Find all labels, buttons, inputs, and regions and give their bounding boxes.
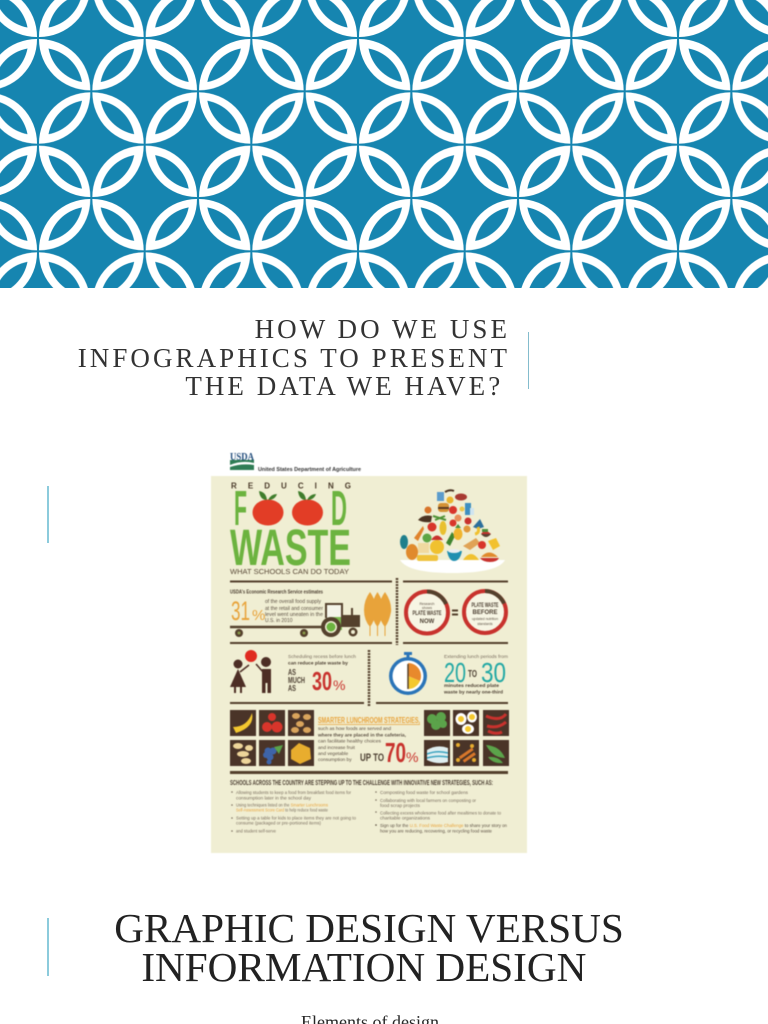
bullet list: left: Using techniques listed on the Smarter Lunchrooms <box>236 802 328 808</box>
chart: plate waste before: BEFORE <box>472 610 498 616</box>
bullet list: right: Composting food waste for school gardens <box>380 790 468 795</box>
text: 31 percent: % <box>252 607 265 624</box>
text: smarter lunchroom strategies <box>317 716 420 768</box>
icon: tractor and trailer <box>230 604 360 637</box>
poster title <box>230 482 351 576</box>
bullet list: left: and student self-serve <box>236 828 277 834</box>
bullet list: left: consume (packaged or pre-portioned items) <box>236 820 322 826</box>
chart: plate waste now: NOW <box>420 619 435 625</box>
text: 30 percent: 30 <box>312 666 332 696</box>
text: 20 to 30 minutes: minutes reduced plate <box>444 683 499 689</box>
title: THE DATA WE HAVE? <box>185 371 503 401</box>
text: 20 to 30 minutes: Extending lunch periods from <box>444 654 508 660</box>
icon: apples <box>252 491 323 526</box>
icon: food pyramid <box>400 490 505 573</box>
text: 31 percent: 31 <box>231 596 250 626</box>
poster title: WHAT SCHOOLS CAN DO TODAY <box>230 567 349 576</box>
poster title: WASTE <box>230 519 351 576</box>
bullet list: right: food scrap projects <box>380 803 420 808</box>
chart: plate waste before <box>464 591 506 633</box>
bullet list: right: how you are reducing, recovering, or recycling food waste <box>380 828 493 834</box>
chart: plate waste now: shows <box>422 606 432 610</box>
bullet list: right: Collecting excess wholesome food after mealtimes to donate to <box>380 810 502 816</box>
poster background <box>211 476 527 853</box>
text: 20 to 30 minutes: waste by nearly one-third <box>443 690 503 696</box>
text: 30 percent: AS <box>288 684 296 693</box>
chart: plate waste now: PLATE WASTE <box>412 611 442 617</box>
accent line: infographic <box>47 486 49 543</box>
accent line: title <box>528 332 529 389</box>
USDA logo: USDA <box>230 452 255 463</box>
text: smarter lunchroom strategies: such as how foods are served and <box>318 726 391 732</box>
text: 31 percent: at the retail and consumer <box>265 606 323 612</box>
heading: schools across the country: SCHOOLS ACROSS THE COUNTRY ARE STEPPING UP TO THE CHALLENGE WITH INNOVATIVE NEW STRATEGIES, SUCH AS: <box>230 780 493 787</box>
icon: stopwatch <box>389 652 427 695</box>
bullet list: left <box>231 790 357 834</box>
title <box>78 314 510 401</box>
text: 30 percent <box>288 654 356 696</box>
text: 30 percent: Scheduling recess before lunch <box>288 654 356 660</box>
text: smarter lunchroom strategies: consumption by <box>318 757 352 763</box>
USDA logo: United States Department of Agriculture <box>258 467 361 473</box>
equals sign <box>452 610 458 614</box>
chart: plate waste before: PLATE WASTE <box>472 603 498 609</box>
chart: plate waste before: standards <box>477 622 493 626</box>
poster title: F <box>234 482 247 536</box>
accent line: second heading <box>47 918 49 976</box>
bullet list: left: Allowing students to keep a food from breakfast food items for <box>236 790 352 795</box>
bullet list: right <box>375 790 508 834</box>
divider: lower <box>230 771 508 774</box>
text: smarter lunchroom strategies: can facilitate healthy choices <box>318 738 382 744</box>
heading: graphic design versus information design: GRAPHIC DESIGN VERSUS <box>114 905 624 951</box>
text: smarter lunchroom strategies: where they are placed in the cafeteria, <box>317 732 407 738</box>
icon: wheat <box>364 592 391 636</box>
text: 30 percent: % <box>333 677 345 693</box>
text: 31 percent: of the overall food supply <box>265 599 322 605</box>
text: 30 percent: can reduce plate waste by <box>288 660 348 666</box>
heading: graphic design versus information design: INFORMATION DESIGN <box>141 944 586 990</box>
text: smarter lunchroom strategies: and vegetable <box>318 751 348 757</box>
text: 20 to 30 minutes: 30 <box>481 657 506 688</box>
text: smarter lunchroom strategies: SMARTER LUNCHROOM STRATEGIES, <box>318 716 420 725</box>
bullet list: left: consumption later in the school day <box>236 796 312 800</box>
USDA infographic poster <box>210 452 528 854</box>
dividers: upper <box>230 582 508 703</box>
icon: children with ball <box>230 650 271 693</box>
text: 30 percent: MUCH <box>288 676 305 685</box>
text: 31 percent: U.S. in 2010 <box>265 618 293 624</box>
bullet list: right: Sign up for the U.S. Food Waste Challenge to share your story on <box>380 823 508 828</box>
poster title: REDUCING <box>231 482 351 490</box>
text: 20 to 30 minutes: 20 <box>444 657 466 688</box>
text: 31 percent <box>230 590 323 626</box>
text: 20 to 30 minutes: TO <box>468 669 477 680</box>
title: INFOGRAPHICS TO PRESENT <box>78 342 510 372</box>
heading: graphic design versus information design <box>114 905 624 990</box>
food tiles <box>230 710 509 766</box>
chart: plate waste before: updated nutrition <box>472 617 498 621</box>
poster title: D <box>331 482 347 536</box>
text: smarter lunchroom strategies: 70 <box>385 737 406 768</box>
chart: plate waste now <box>406 592 448 634</box>
text: 31 percent: USDA's Economic Research Service estimates <box>230 590 323 596</box>
chart: plate waste now: Research <box>420 602 435 606</box>
bullet list: left: Setting up a table for kids to place items they are not going to <box>236 816 357 820</box>
USDA logo <box>230 452 361 473</box>
text: smarter lunchroom strategies: % <box>406 749 418 765</box>
text: smarter lunchroom strategies: and increase fruit <box>318 745 355 751</box>
bullet list: right: Collaborating with local farmers on composting or <box>380 798 477 803</box>
patterned banner <box>0 0 768 288</box>
text: 20 to 30 minutes <box>443 654 508 696</box>
bullet list: left: Self-Assessment Score Card to help reduce food waste <box>236 808 329 812</box>
title: HOW DO WE USE <box>255 314 510 344</box>
text: 30 percent: AS <box>288 668 296 677</box>
bullet list: right: charitable organizations <box>380 816 430 820</box>
text: smarter lunchroom strategies: UP TO <box>360 752 384 764</box>
text: 31 percent: level went uneaten in the <box>265 612 323 618</box>
